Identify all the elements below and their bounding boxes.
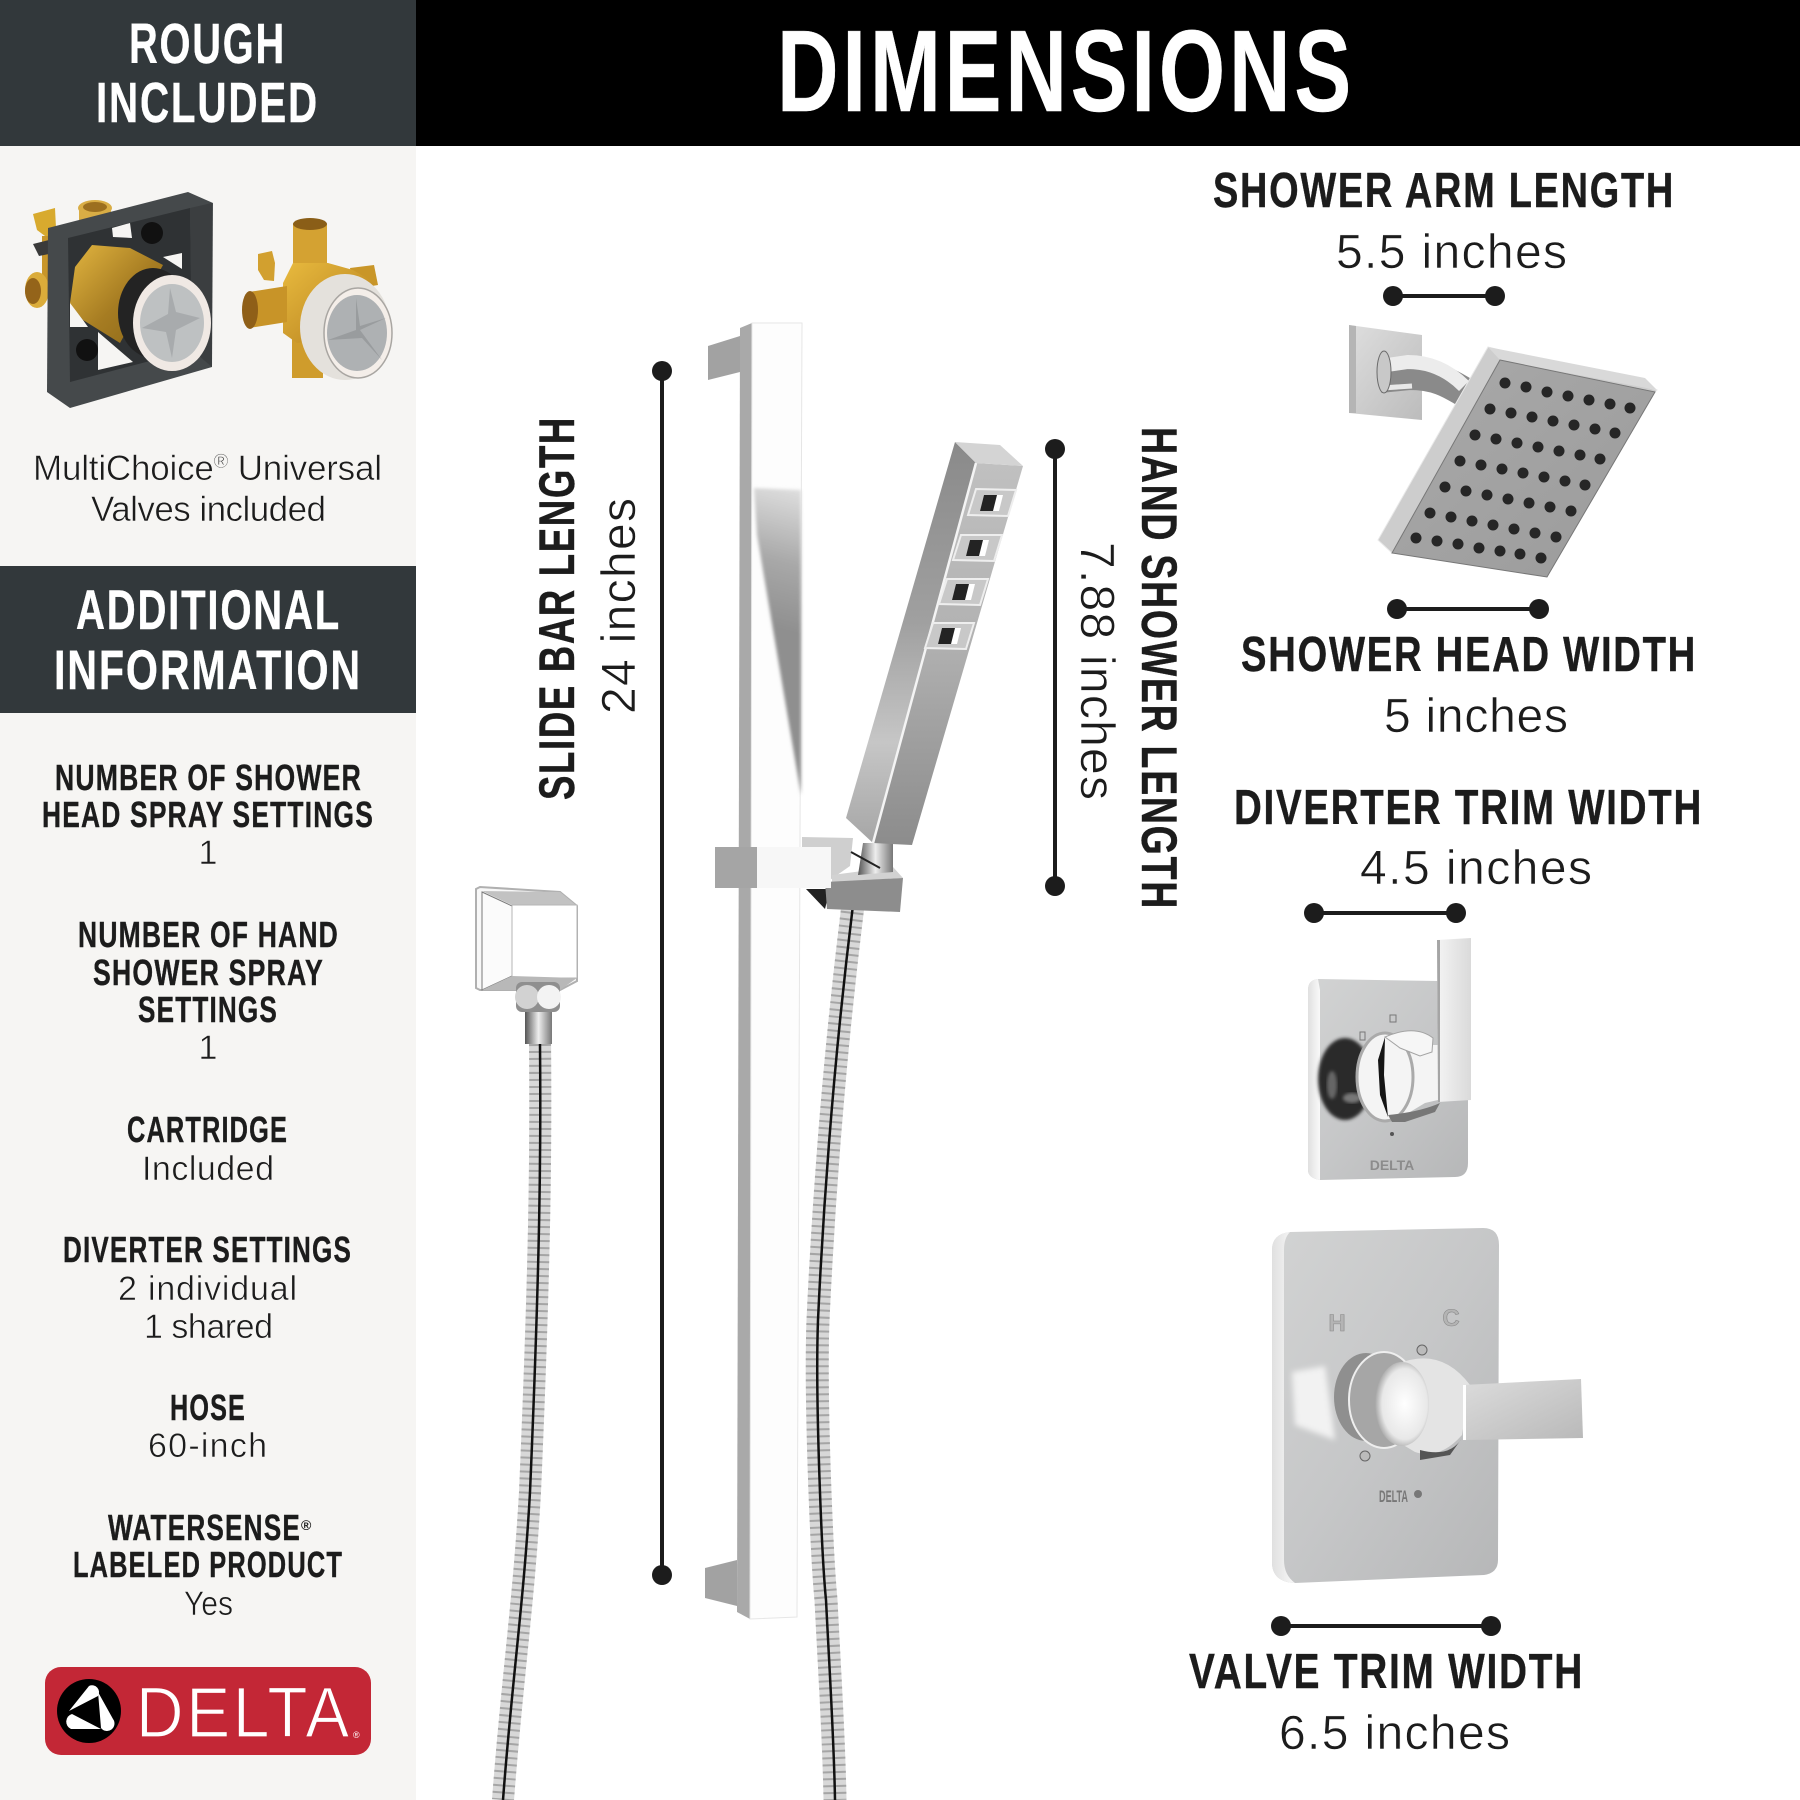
label: shower head width: 5 inches (1384, 690, 1568, 743)
header bar: dimensions: DIMENSIONS (777, 6, 1355, 136)
label: slide bar length: SLIDE BAR LENGTH (529, 416, 585, 800)
label: slide bar length: 24 inches (593, 498, 646, 714)
spec: shower head spray settings: NUMBER OF SHOWER (55, 757, 362, 798)
hose: hand shower hose (817, 905, 853, 1800)
spec: watersense labeled product: Yes (184, 1585, 233, 1623)
spec: watersense labeled product (73, 1507, 343, 1623)
spec: hand shower spray settings: SHOWER SPRAY (93, 952, 324, 993)
spec: hand shower spray settings: NUMBER OF HAND (78, 914, 339, 955)
heading: rough included (0, 0, 416, 146)
dimension line: shower arm (1383, 286, 1505, 306)
spec: hand shower spray settings (78, 914, 339, 1067)
dimension line: valve trim (1271, 1616, 1501, 1636)
label: valve trim width (1189, 1645, 1584, 1760)
label: valve trim width: VALVE TRIM WIDTH (1189, 1645, 1584, 1699)
label: shower arm length: SHOWER ARM LENGTH (1213, 164, 1675, 218)
heading: additional information: INFORMATION (54, 638, 362, 701)
icon: valve trim: H (1328, 1310, 1346, 1337)
label: diverter trim width (1234, 781, 1703, 895)
icon: shower arm and head (1349, 325, 1657, 577)
slide bar bracket and holder (715, 837, 903, 912)
heading: rough included: ROUGH (129, 12, 286, 76)
label: hand shower length (1070, 427, 1187, 910)
spec: watersense labeled product: WATERSENSE (108, 1507, 301, 1548)
icon: valve trim: DELTA (1379, 1487, 1408, 1506)
icon: diverter trim: DELTA (1370, 1157, 1414, 1173)
icon: diverter trim (1308, 938, 1471, 1180)
icon: wall outlet (476, 887, 577, 1044)
spec: hose: HOSE (170, 1387, 246, 1428)
hand shower nozzles (925, 489, 1016, 649)
slide bar (705, 323, 802, 1619)
dimension line: diverter trim (1304, 903, 1466, 923)
spec: hose: 60-inch (148, 1427, 267, 1465)
heading: rough included: INCLUDED (96, 71, 319, 135)
spec: diverter settings: 2 individual (118, 1270, 297, 1308)
label: valve trim width: 6.5 inches (1279, 1707, 1510, 1760)
logo: delta (45, 1667, 371, 1755)
label: shower arm length (1213, 164, 1675, 279)
heading: additional information: ADDITIONAL (76, 578, 341, 641)
text block: valves included: Valves included (91, 490, 326, 529)
spec: diverter settings (63, 1229, 352, 1346)
text block: valves included: Universal (228, 449, 382, 488)
spec: diverter settings: 1 shared (144, 1308, 273, 1346)
spec: cartridge: CARTRIDGE (127, 1109, 288, 1150)
label: diverter trim width: 4.5 inches (1360, 842, 1592, 895)
spec: hand shower spray settings: SETTINGS (138, 989, 278, 1030)
heading: additional information (0, 566, 416, 713)
spec: cartridge (127, 1109, 288, 1188)
spec: shower head spray settings: HEAD SPRAY SETTINGS (42, 794, 374, 835)
label: shower head width (1241, 628, 1697, 743)
spec: cartridge: Included (142, 1150, 274, 1188)
text block: valves included: ® (214, 451, 229, 473)
dimension line: hand shower length (1045, 439, 1065, 896)
label: hand shower length: 7.88 inches (1070, 542, 1123, 800)
left sidebar background (0, 0, 416, 1800)
text block: valves included (33, 449, 382, 529)
header bar: dimensions (416, 0, 1800, 146)
label: hand shower length: HAND SHOWER LENGTH (1131, 427, 1187, 910)
spec: shower head spray settings (42, 757, 374, 872)
icon: rough-in valve with mounting frame (25, 192, 213, 408)
hose: wall outlet hose (503, 1030, 540, 1800)
spec: shower head spray settings: 1 (199, 834, 217, 872)
icon: valve trim: C (1442, 1305, 1460, 1332)
spec: hose (148, 1387, 267, 1465)
icon: valve trim (1272, 1228, 1583, 1583)
dimension line: slide bar length (652, 361, 672, 1585)
label: shower arm length: 5.5 inches (1336, 226, 1567, 279)
logo: delta: ® (353, 1730, 360, 1740)
logo: delta: DELTA (136, 1674, 352, 1753)
icon: hand shower (846, 442, 1023, 845)
icon: rough-in valve without frame (242, 218, 392, 380)
label: slide bar length (529, 416, 646, 800)
spec: diverter settings: DIVERTER SETTINGS (63, 1229, 352, 1270)
spec: watersense labeled product: ® (301, 1517, 312, 1533)
shower head spray nozzles (1410, 378, 1636, 564)
spec: hand shower spray settings: 1 (199, 1029, 217, 1067)
spec: watersense labeled product: LABELED PRODUCT (73, 1544, 343, 1585)
dimension line: shower head width (1387, 599, 1549, 619)
text block: valves included: MultiChoice (33, 449, 214, 488)
